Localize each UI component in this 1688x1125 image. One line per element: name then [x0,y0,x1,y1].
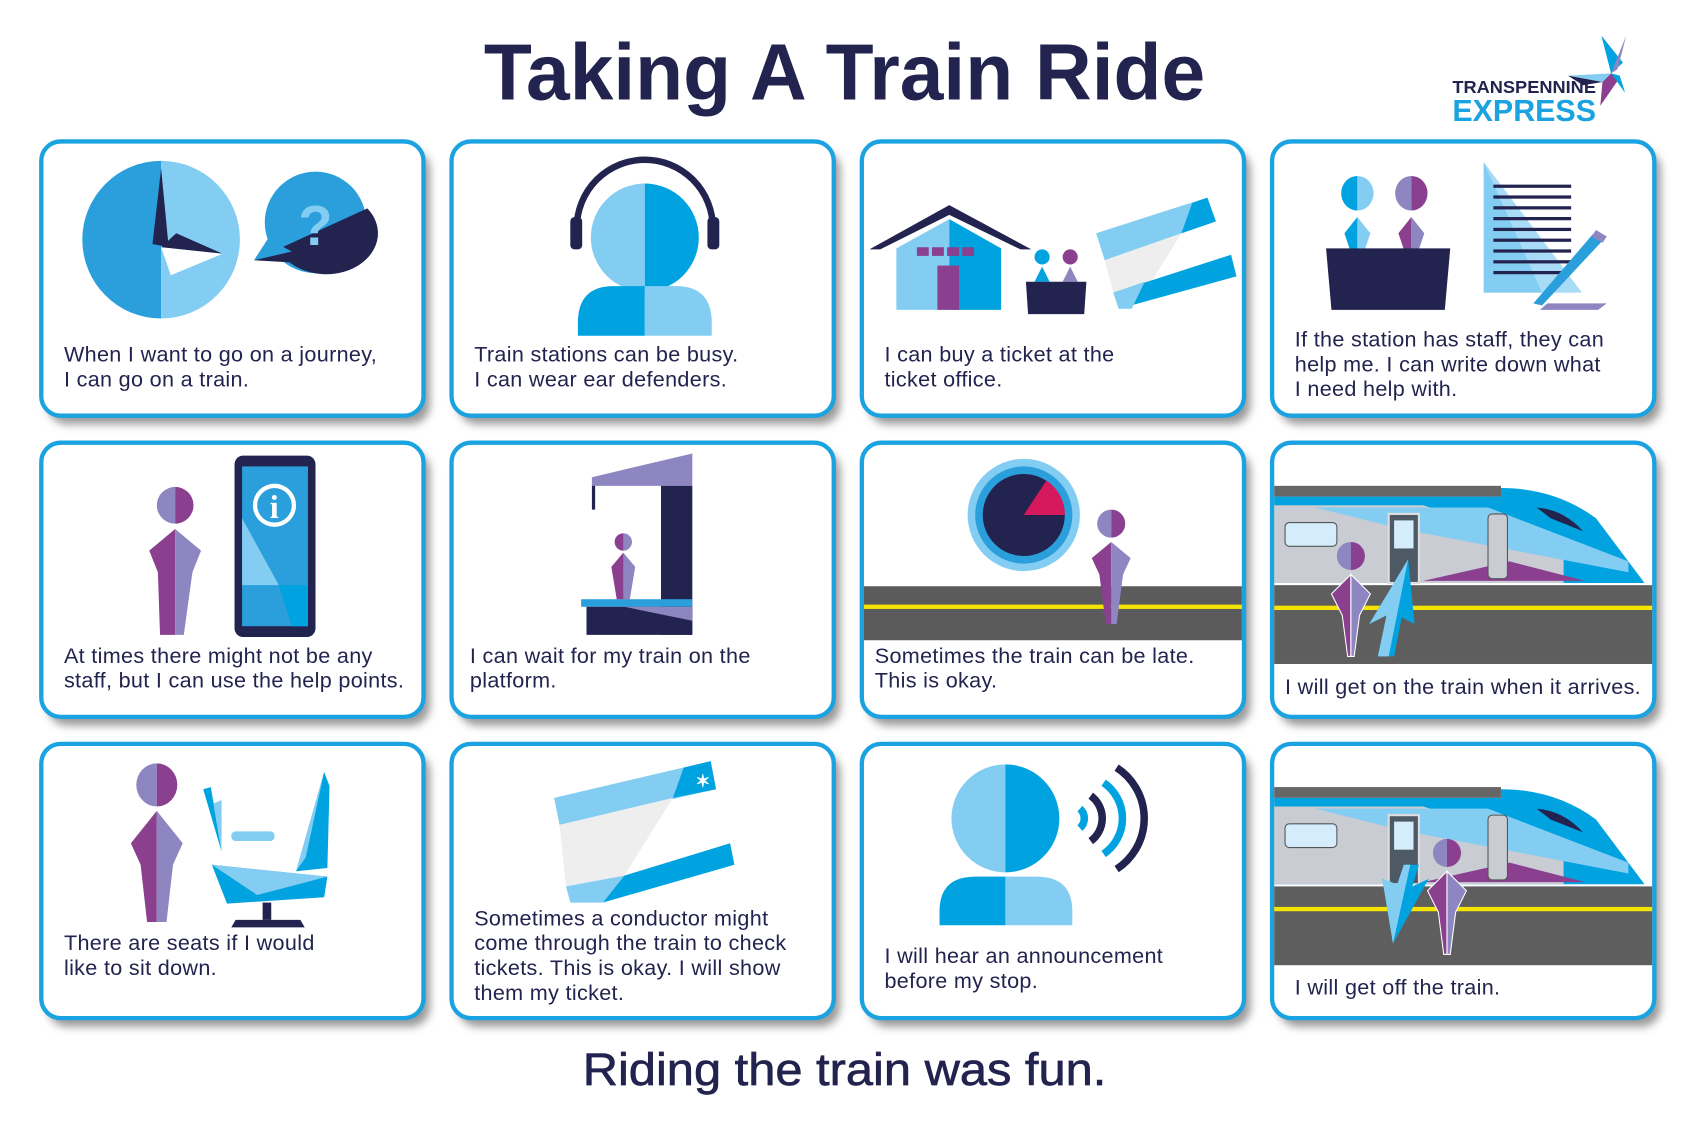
footer text: Riding the train was fun. [583,1044,1106,1095]
panel: journey clock [41,141,430,424]
text: I will hear an announcement [884,943,1163,968]
panel: platform wait [452,443,840,726]
logo: TransPennine Express [1452,36,1626,128]
panel: seats: like to sit down. [64,955,217,980]
icon: train seat [203,772,330,927]
text: I will get on the train when it arrives. [1285,674,1641,699]
panel: help points [41,443,430,726]
text: Sometimes a conductor might [474,905,768,930]
panel: get off train [1272,744,1661,1027]
text: If the station has staff, they can [1295,327,1604,352]
icon: clock [82,161,240,318]
icon: clock late [968,459,1080,571]
panel: seats [41,744,430,1027]
icon: sound waves [1080,768,1144,869]
icon: paper and pencil [1484,162,1607,310]
panel: conductor tickets: tickets. This is okay. I will show [474,955,781,980]
icon: person with headphones [570,160,719,336]
icon: ticket: ✶ [696,771,710,791]
icon: speech bubble question [254,172,378,274]
text: I can buy a ticket at the [884,342,1115,367]
icon: ticket [554,761,734,903]
panel: platform wait: platform. [470,668,557,693]
panel: get on train [1272,443,1661,726]
panel: conductor tickets [452,744,840,1027]
panel: station staff: I need help with. [1295,376,1457,401]
panel: conductor tickets: come through the train to check [474,930,787,955]
icon: person [131,763,183,922]
text: I will get off the train. [1295,974,1500,999]
text: Sometimes the train can be late. [875,643,1195,668]
icon: station house [869,205,1031,310]
icon: help point phone [235,456,316,637]
text: At times there might not be any [64,643,373,668]
panel: station staff [1272,141,1661,424]
logo: TransPennine Express: EXPRESS [1452,95,1596,128]
panel: announcement [862,744,1250,1027]
icon: train [1274,787,1652,965]
icon: shelter [581,453,692,635]
text: Train stations can be busy. [474,342,738,367]
icon: two staff at desk [1326,176,1450,310]
icon: ticket desk [1026,249,1086,314]
panel: ear defenders [452,141,840,424]
title: Taking A Train Ride [484,27,1205,116]
panel: train late [862,443,1250,726]
panel: help points: staff, but I can use the help points. [64,668,404,693]
panel: journey clock: I can go on a train. [64,367,249,392]
panel: ear defenders: I can wear ear defenders. [474,367,727,392]
icon: person [149,487,201,635]
icon: person [1092,510,1131,624]
panel: conductor tickets: them my ticket. [474,980,624,1005]
panel: ticket office [862,141,1250,424]
panel: train late: This is okay. [875,668,997,693]
platform [864,586,1242,640]
text: I can wait for my train on the [470,643,751,668]
icon: person boarding [1331,542,1415,656]
panel: station staff: help me. I can write down what [1295,351,1601,376]
text: There are seats if I would [64,930,315,955]
icon: person leaving [1382,839,1466,954]
icon: speech bubble question: ? [298,194,333,257]
panel: ticket office: ticket office. [884,367,1003,392]
text: When I want to go on a journey, [64,342,377,367]
icon: train [1274,486,1652,664]
icon: person listening [940,764,1072,925]
icon: help point phone: i [270,490,279,526]
icon: ticket [1096,198,1236,309]
logo: TransPennine Express: TRANSPENNINE [1452,77,1596,97]
panel: announcement: before my stop. [884,968,1038,993]
